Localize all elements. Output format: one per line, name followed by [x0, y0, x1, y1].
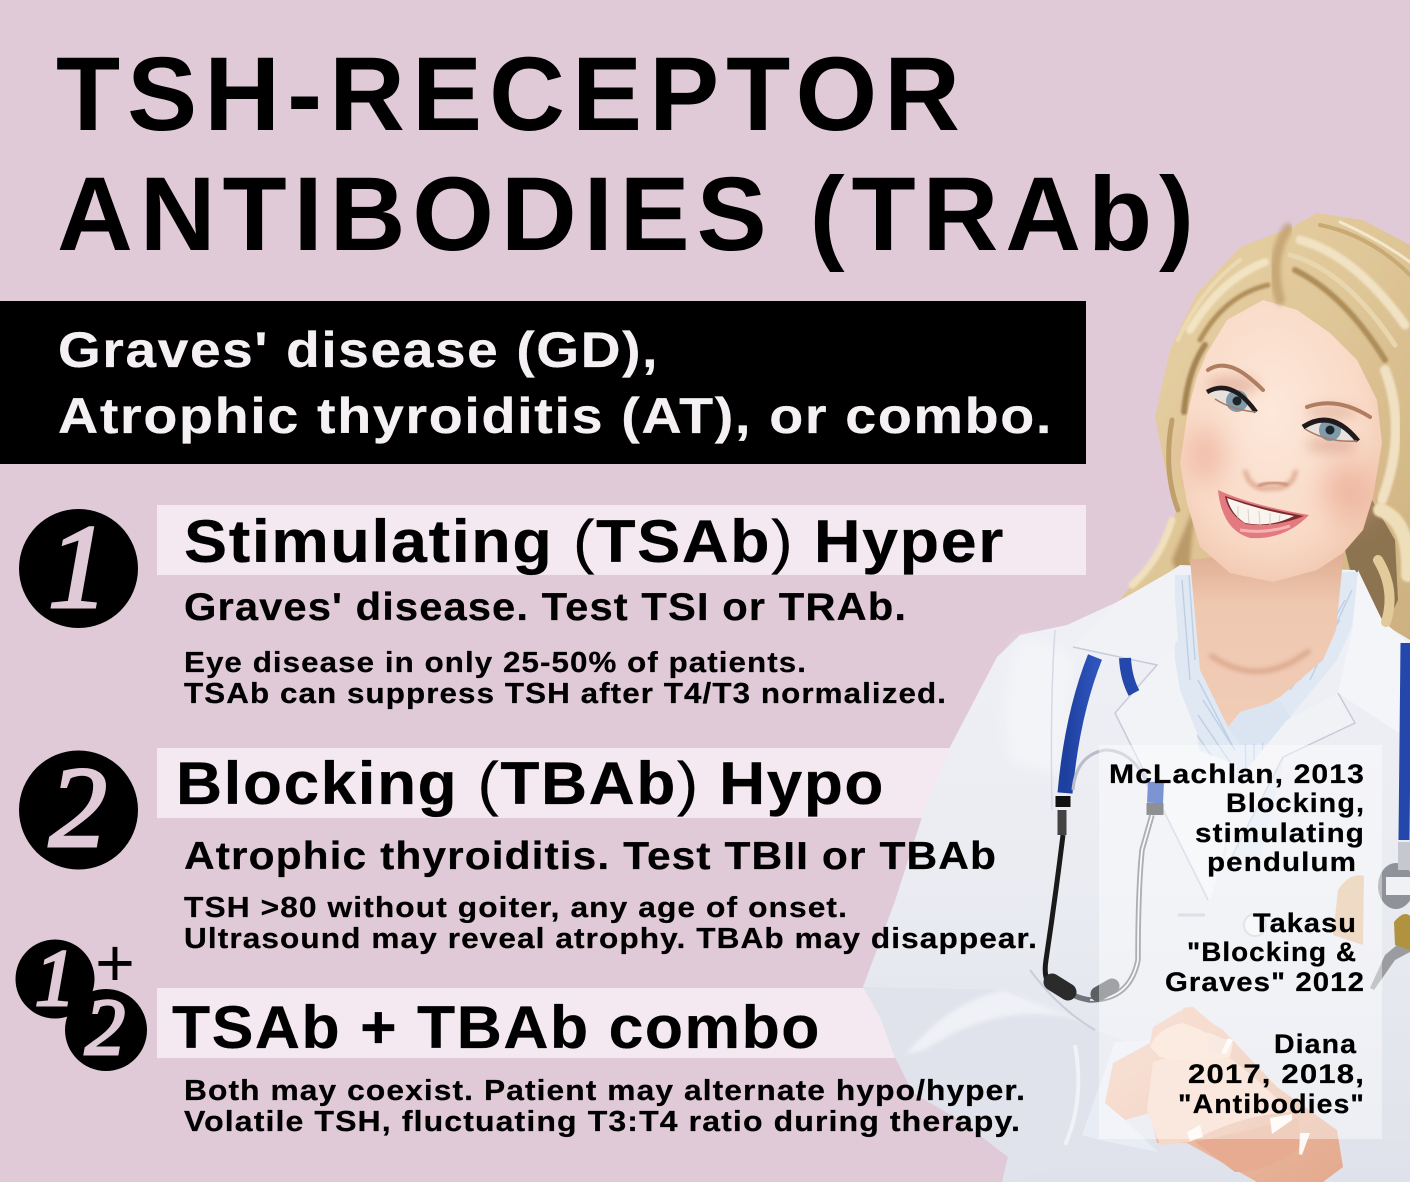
- neck: [1190, 540, 1345, 727]
- references panel: "Antibodies": [1178, 1089, 1365, 1119]
- section 2: blocking: Atrophic thyroiditis. Test TBII or TBAb: [184, 835, 997, 878]
- section 3: combo: Volatile TSH, fluctuating T3:T4 ratio during therapy.: [184, 1106, 1021, 1138]
- doctor photo illustration: [863, 213, 1410, 1182]
- left collar: [1073, 570, 1178, 665]
- section 2: blocking: Ultrasound may reveal atrophy. TBAb may disappear.: [184, 923, 1038, 955]
- hair shadow behind neck: [1345, 500, 1398, 628]
- eye socket shadows: [1207, 376, 1358, 453]
- pen: [1370, 914, 1410, 990]
- cheeks: [1187, 427, 1372, 520]
- section 2: blocking: Blocking (TBAb) Hypo: [176, 750, 885, 817]
- references panel: [1099, 745, 1382, 1139]
- hair back: [1115, 213, 1410, 642]
- number badge 2: [19, 744, 138, 872]
- shirt collar: [1228, 700, 1290, 745]
- section 1: stimulating: Eye disease in only 25-50% of patients.: [184, 647, 807, 679]
- section 3: combo: Both may coexist. Patient may alternate hypo/hyper.: [184, 1075, 1026, 1107]
- hands: [1105, 1007, 1343, 1182]
- combined badge 1 + 2: 1: [35, 935, 75, 1023]
- hair front strands: [1132, 222, 1410, 622]
- banner: conditions: Graves' disease (GD),: [58, 322, 659, 378]
- banner: conditions: [0, 301, 1086, 464]
- smile: [1218, 490, 1309, 538]
- references panel: pendulum: [1207, 847, 1357, 877]
- title: TSH-RECEPTOR: [56, 36, 960, 153]
- combined badge 1 + 2: 2: [85, 984, 125, 1072]
- banner: conditions: Atrophic thyroiditis (AT), or combo.: [58, 388, 1053, 444]
- right lapel: [1225, 693, 1355, 870]
- section 3: combo: TSAb + TBAb combo: [172, 994, 821, 1061]
- left lapel: [1115, 647, 1237, 900]
- title: ANTIBODIES (TRAb): [57, 156, 1194, 273]
- section 3: combo: [172, 994, 1026, 1138]
- fingers: [1147, 1055, 1290, 1145]
- right collar: [1338, 570, 1410, 740]
- references panel: Blocking,: [1226, 788, 1365, 818]
- neck crease: [1210, 650, 1310, 671]
- face: [1180, 300, 1382, 582]
- number badge 2: 2: [49, 744, 107, 872]
- heading bars: [157, 505, 1086, 1058]
- section 1: stimulating: Stimulating (TSAb) Hyper: [184, 508, 1005, 575]
- section 2: blocking: TSH >80 without goiter, any age of onset.: [184, 892, 848, 924]
- section 1: stimulating: TSAb can suppress TSH after T4/T3 normalized.: [184, 678, 947, 710]
- coat inner arm highlights: [1006, 640, 1075, 775]
- shirt stripes: [1182, 575, 1352, 790]
- title: [56, 36, 1194, 273]
- sleeve: [863, 987, 1135, 1182]
- brows: [1208, 366, 1370, 417]
- combined badge 1 + 2: [16, 925, 147, 1072]
- eye left: [1207, 388, 1256, 412]
- section 1: stimulating: [184, 508, 1005, 710]
- nose: [1245, 470, 1296, 489]
- references panel: McLachlan, 2013: [1109, 759, 1365, 789]
- lapel outlines: [1073, 647, 1355, 900]
- references panel: Graves" 2012: [1165, 967, 1365, 997]
- shirt cuff: [1082, 1040, 1158, 1152]
- shirt: [1175, 572, 1358, 860]
- references panel: Diana: [1274, 1029, 1357, 1059]
- stethoscope: [1045, 643, 1406, 1000]
- section 1: stimulating: Graves' disease. Test TSI or TRAb.: [184, 586, 907, 629]
- references panel: "Blocking &: [1187, 937, 1357, 967]
- hair shadow left: [1172, 505, 1205, 585]
- number badge 1: [19, 500, 138, 633]
- shirt button and pocket: [1178, 914, 1266, 936]
- chestpiece: [1378, 842, 1410, 909]
- number badge 1: 1: [48, 500, 108, 633]
- references panel: 2017, 2018,: [1188, 1059, 1365, 1089]
- nails: [1187, 1036, 1310, 1155]
- eye right: [1303, 419, 1358, 441]
- section 2: blocking: [176, 750, 1038, 955]
- combined badge 1 + 2: +: [95, 925, 135, 1001]
- tongue depressor: [1333, 875, 1364, 945]
- references panel: stimulating: [1195, 818, 1365, 848]
- references panel: Takasu: [1253, 908, 1357, 938]
- coat: [863, 565, 1410, 1182]
